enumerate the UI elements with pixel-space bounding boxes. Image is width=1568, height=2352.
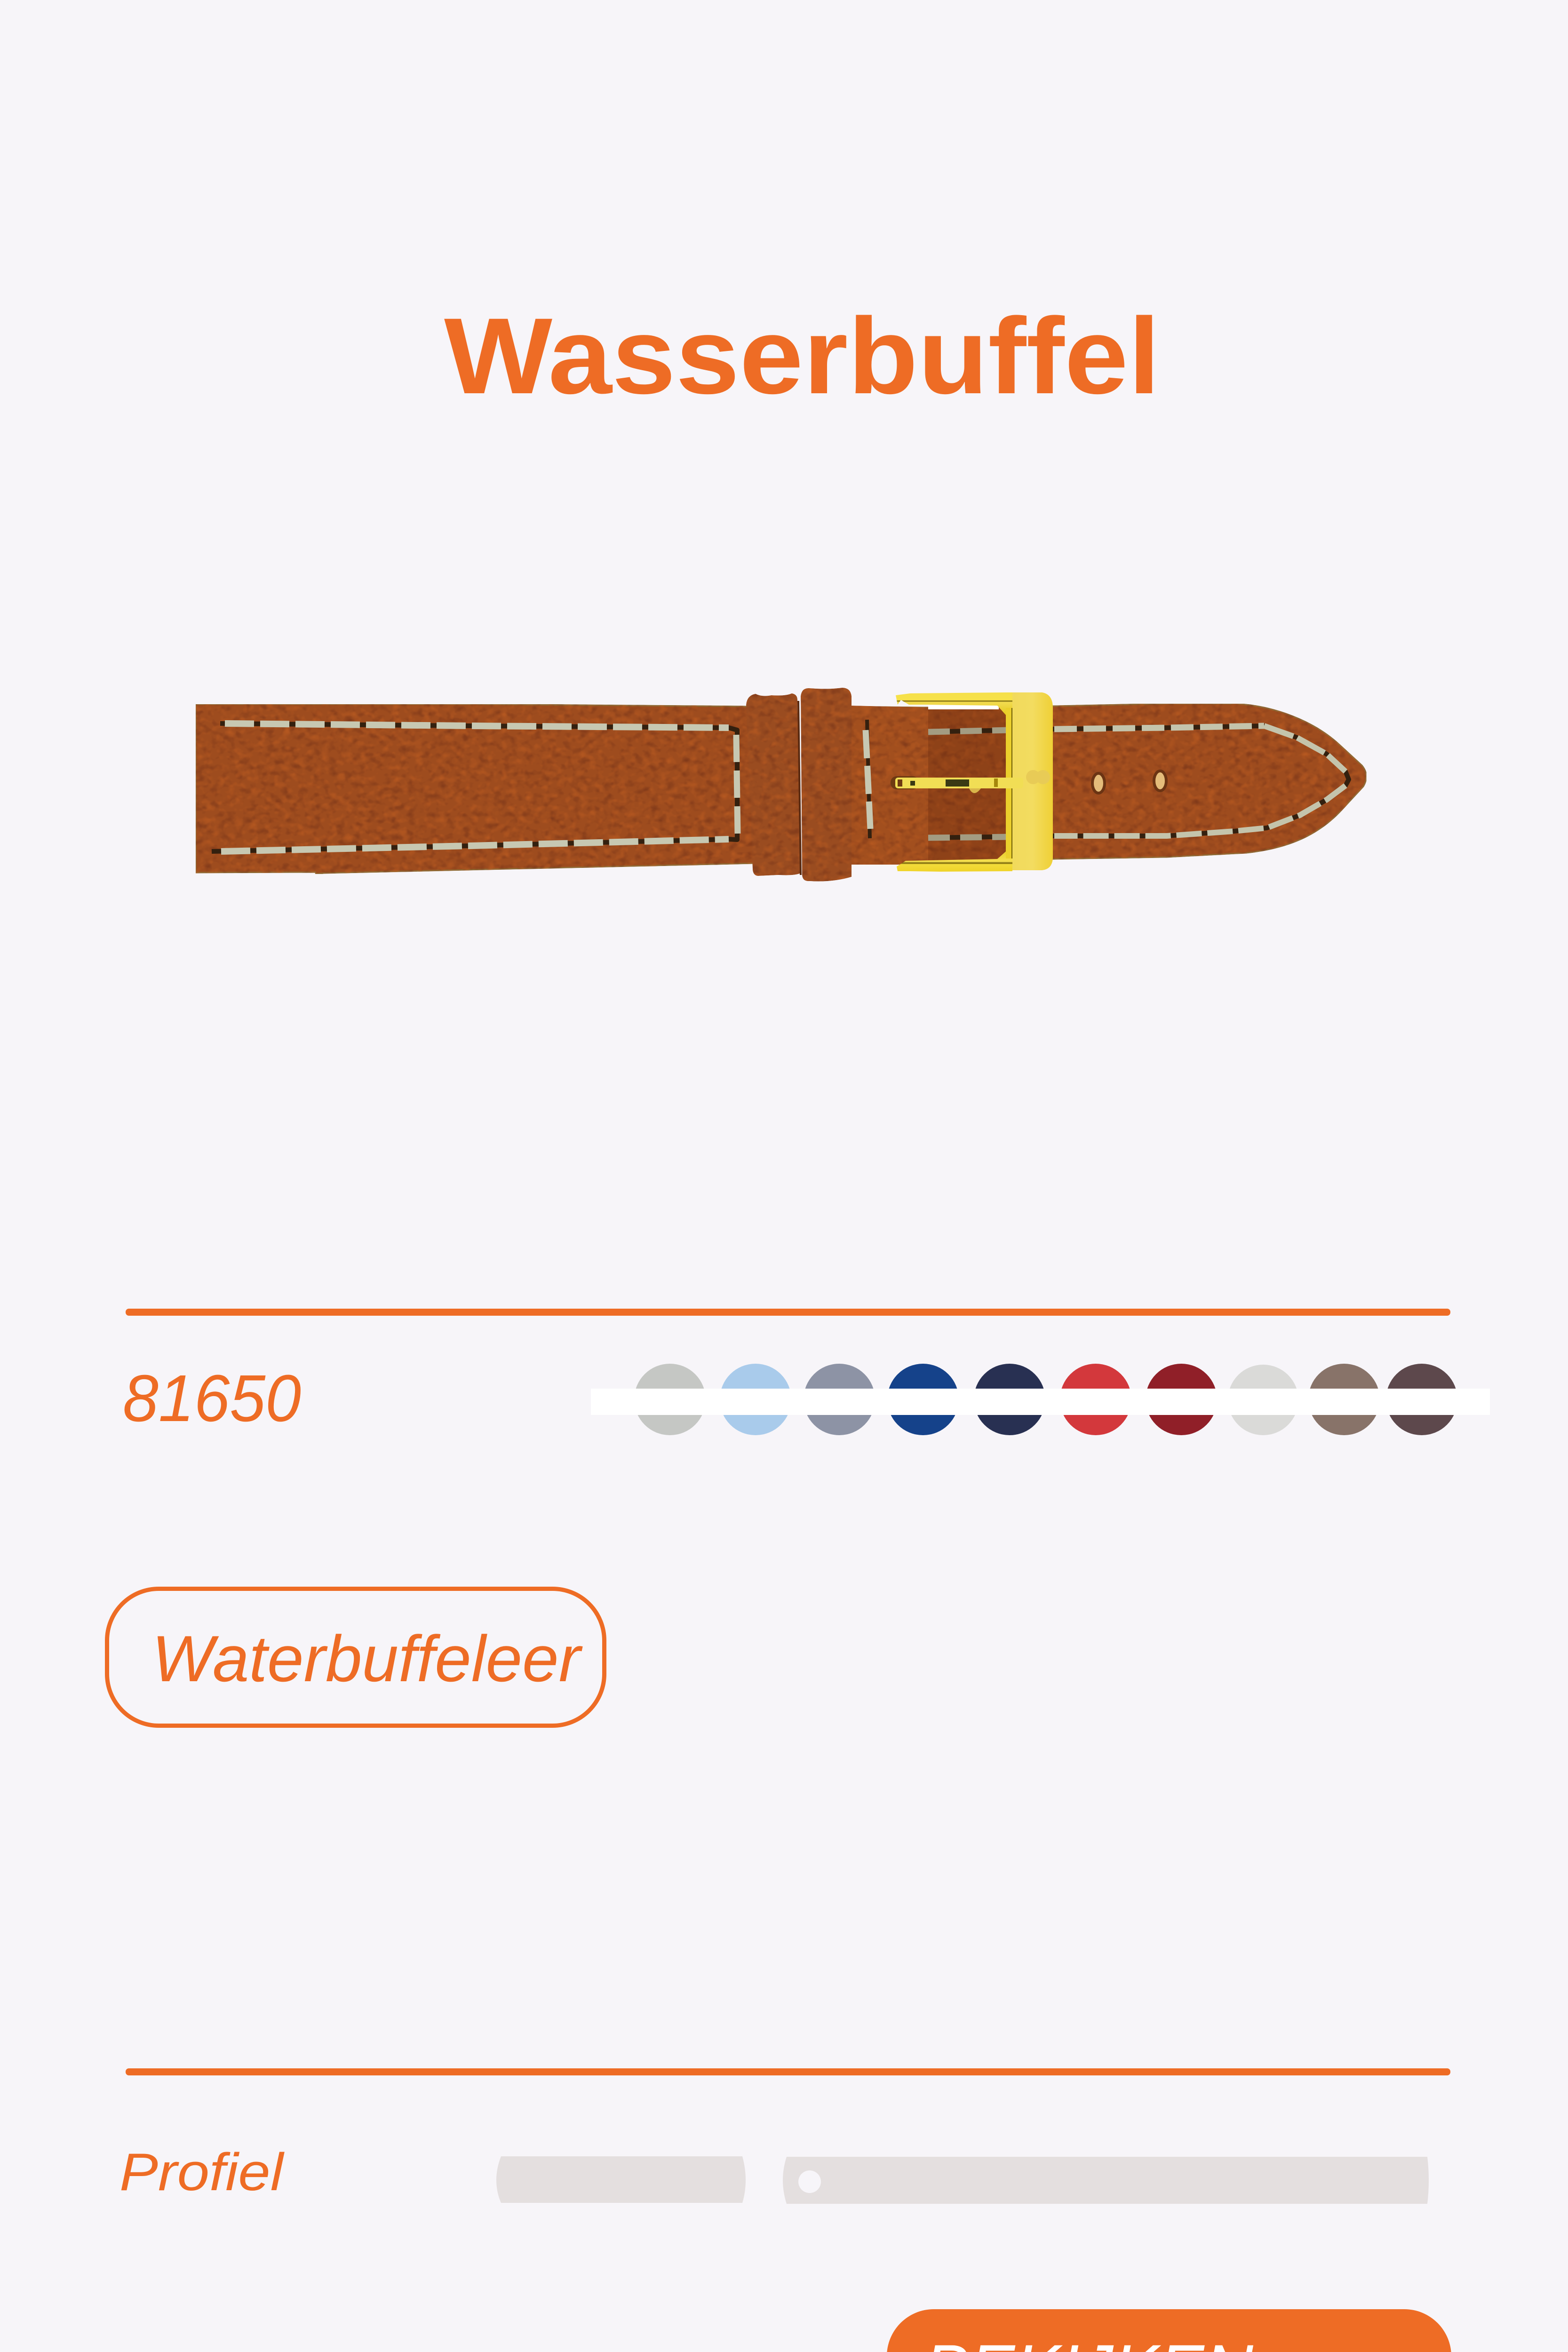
keeper loop: right bbox=[801, 688, 852, 882]
material tag bbox=[107, 1589, 604, 1725]
keeper loop: left bbox=[746, 693, 801, 876]
tag label: Waterbuffeleer bbox=[152, 1622, 583, 1695]
strap: second vertical stitch bbox=[866, 720, 870, 838]
strap holes bbox=[1092, 771, 1166, 793]
profile: hole bbox=[798, 2170, 821, 2193]
profile: short piece bbox=[496, 2156, 746, 2203]
buckle: pin bbox=[891, 776, 1023, 793]
buckle: frame bar bbox=[1012, 692, 1053, 870]
buckle: frame shadow line bbox=[1011, 708, 1013, 858]
strap stitching bbox=[212, 723, 1349, 851]
profile label: Profiel bbox=[119, 2143, 285, 2201]
profile diagram bbox=[496, 2156, 1429, 2204]
divider: top bbox=[126, 1309, 1450, 1316]
product image: brown water buffalo leather watch strap bbox=[196, 688, 1366, 882]
profile: long piece with hole bbox=[783, 2157, 1429, 2204]
strap: long piece with square end bbox=[196, 704, 757, 874]
buckle: frame side bbox=[1006, 708, 1011, 858]
buckle window gap bbox=[928, 705, 999, 709]
strap: darker area inside buckle bbox=[928, 709, 1011, 861]
buckle: top arm bbox=[896, 692, 1012, 715]
article number: 81650 bbox=[123, 1361, 301, 1435]
strap: buckle side with pointed tip bbox=[842, 704, 1366, 865]
colour swatches bbox=[591, 1364, 1490, 1435]
divider: bottom bbox=[126, 2068, 1450, 2075]
white band across swatches bbox=[591, 1389, 1490, 1415]
buckle: logo bbox=[1026, 770, 1050, 784]
gap between keepers bbox=[798, 701, 801, 875]
buckle: bottom arm bbox=[897, 851, 1012, 872]
tag outline bbox=[107, 1589, 604, 1725]
button: bekijken bbox=[887, 2309, 1451, 2352]
strap: band under buckle bbox=[852, 706, 928, 865]
button background bbox=[887, 2309, 1451, 2352]
title: Wasserbuffel bbox=[444, 295, 1160, 416]
